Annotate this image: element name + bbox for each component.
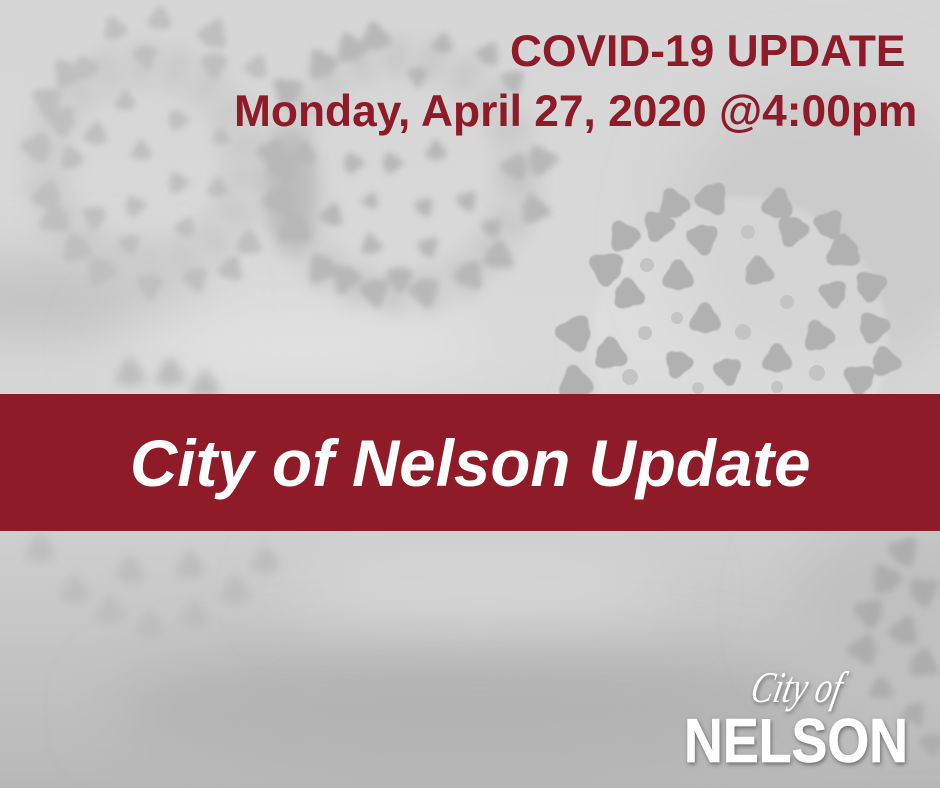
heading: date and time: Monday, April 27, 2020 @4:00pm [234, 87, 917, 136]
virus particle: right (sharp) [555, 180, 903, 493]
virus particle: upper centre (blurred) [254, 19, 559, 311]
logo script line: City of [747, 662, 852, 712]
logo: City of Nelson [684, 662, 908, 776]
virus particle: faint behind banner [25, 357, 280, 640]
heading: COVID-19 update: COVID-19 UPDATE [510, 27, 905, 76]
virus particle: upper left (blurred) [20, 5, 272, 300]
banner [0, 394, 940, 531]
virus particle: lower right [847, 529, 940, 759]
logo wordmark: NELSON [684, 707, 908, 776]
banner title: City of Nelson Update [130, 427, 811, 500]
